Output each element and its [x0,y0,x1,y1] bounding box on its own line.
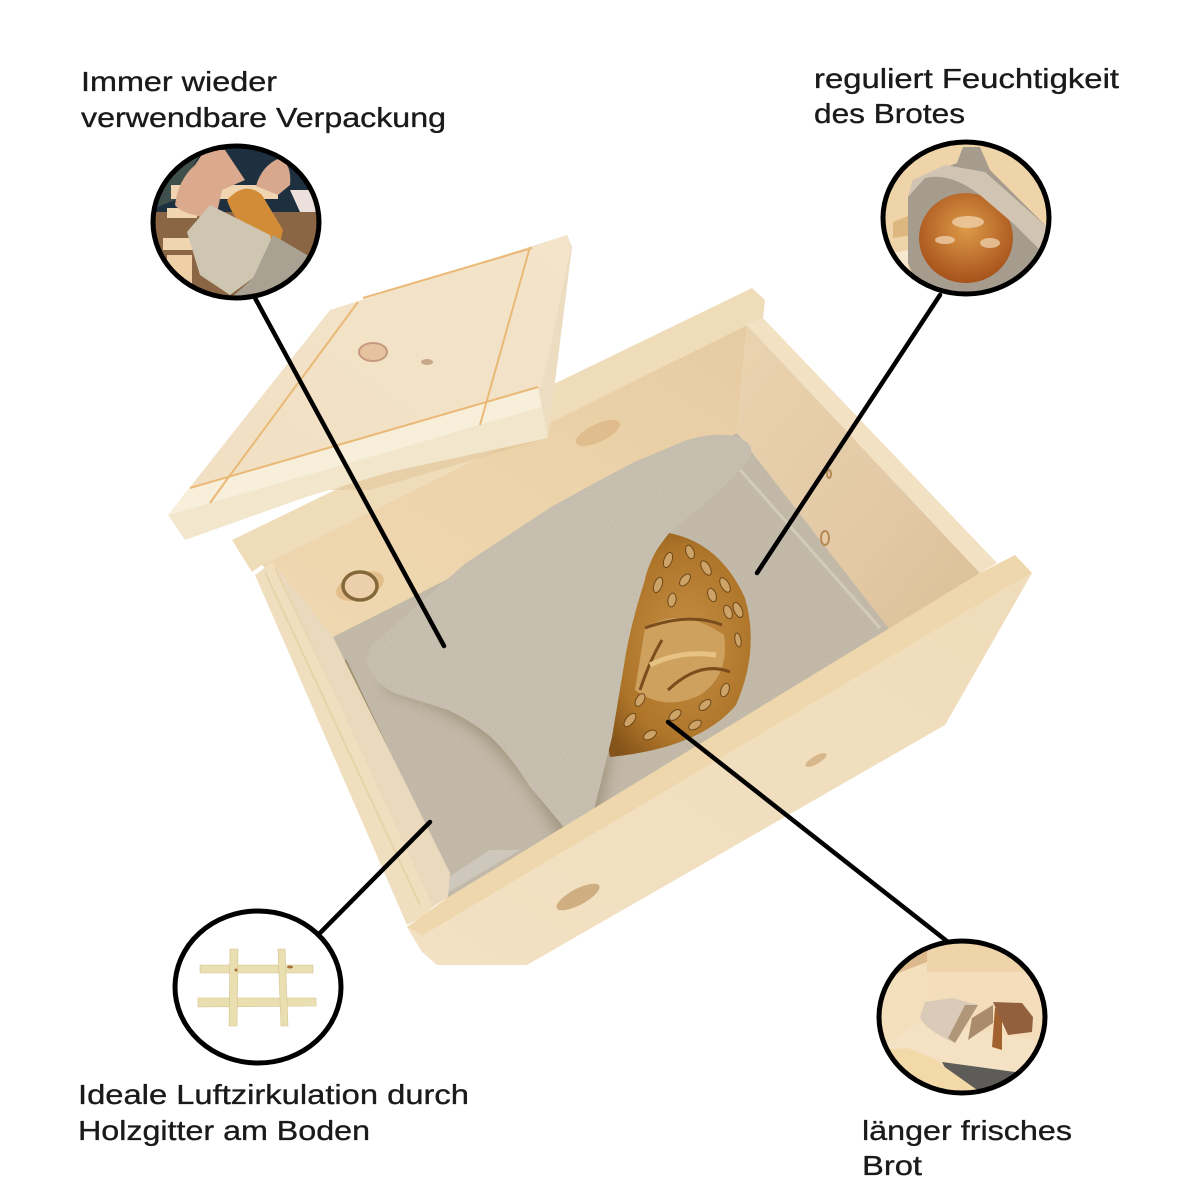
circle outline [879,941,1045,1093]
photo circle: sliced bread in box [882,944,1042,1090]
heading: Ideale Luftzirkulation durch [78,1079,469,1110]
box right wall inner [737,325,980,630]
photo circle: bread under linen [886,144,1046,292]
right wall knots [821,470,831,545]
lid right side face [538,235,572,438]
circle outline [883,142,1049,294]
back wall knot [332,565,388,607]
wood grain knot on back wall [572,415,624,451]
box left wall inner [275,565,450,907]
front board knots [553,751,828,915]
crumb score [635,618,725,702]
circle outline [175,911,341,1063]
heading: reguliert Feuchtigkeit [814,63,1119,94]
heading: Immer wieder [81,66,277,97]
crust [590,533,751,757]
lid grooves [190,247,538,503]
shadow under upper cloth [382,686,616,834]
photo circle: hands wrapping croissant [156,148,316,296]
callout: fresher bread [862,940,1072,1181]
lid [168,235,572,540]
lid knots [359,343,433,365]
lid front bevel [168,387,542,515]
callout: regulates moisture: des Brotes [814,98,965,129]
callout: reusable packaging [81,66,446,300]
callout: wood grid air circulation [78,911,469,1146]
callout: reusable packaging: verwendbare Verpackung [81,102,446,133]
seeds [622,544,745,742]
box back rim [232,288,765,572]
box back wall inner [262,325,747,637]
icon: wood lattice [198,949,316,1026]
wooden bread box [168,235,1032,965]
line to floor cloth [757,295,940,573]
cloth stitched hem [345,455,880,893]
bread loaf [590,533,751,757]
box front board face [407,573,1032,965]
circle outline [153,146,319,298]
line to wood grid [318,822,430,935]
line to cloth [255,298,444,646]
lid underside shadow on back wall [305,425,548,490]
heading: länger frisches [862,1115,1072,1146]
callout: wood grid air circulation: Holzgitter am Boden [78,1115,370,1146]
box right rim [747,318,997,573]
box left wall rim [255,562,440,925]
callout: fresher bread: Brot [862,1150,922,1181]
linen cloth folded over bread [367,435,751,830]
line to bread [668,722,948,942]
callout: regulates moisture [814,63,1119,296]
leader lines [255,295,948,942]
lid top face [168,235,571,515]
box front board top rim [407,555,1032,936]
lid front face [168,407,548,540]
linen cloth on the floor [328,425,895,900]
